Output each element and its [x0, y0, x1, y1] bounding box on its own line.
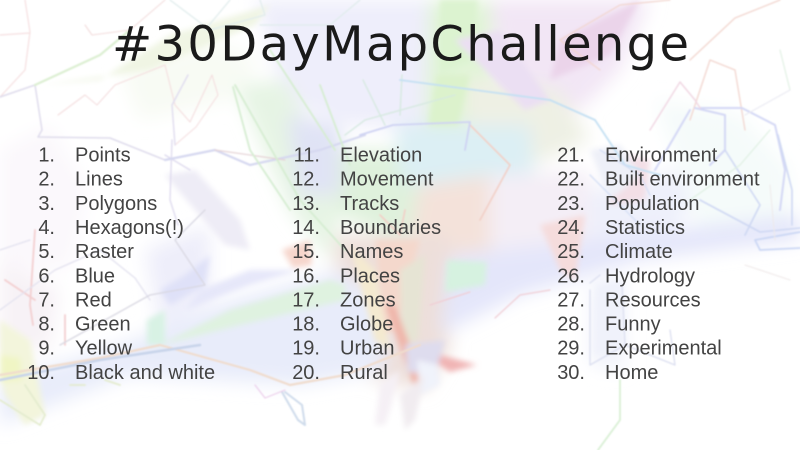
list column: days 1 to 10: Raster	[75, 241, 134, 263]
list column: days 21 to 30: Environment	[605, 144, 718, 166]
list column: days 1 to 10: 8.	[38, 314, 55, 336]
list column: days 21 to 30: 22.	[557, 169, 585, 191]
list column: days 1 to 10: Red	[75, 289, 112, 311]
list column: days 21 to 30: Built environment	[605, 169, 760, 191]
title: #30DayMapChallenge	[112, 16, 689, 72]
list column: days 11 to 20: Places	[340, 265, 400, 287]
list column: days 21 to 30: 21.	[557, 144, 585, 166]
list column: days 21 to 30: Population	[605, 193, 700, 215]
list column: days 1 to 10: Lines	[75, 169, 123, 191]
list column: days 1 to 10: Hexagons(!)	[75, 217, 184, 239]
list column: days 1 to 10: Green	[75, 314, 131, 336]
list column: days 21 to 30: Climate	[605, 241, 673, 263]
list column: days 11 to 20: Names	[340, 241, 403, 263]
list column: days 21 to 30: Resources	[605, 289, 701, 311]
list column: days 11 to 20: 15.	[292, 241, 320, 263]
list column: days 21 to 30: Experimental	[605, 338, 722, 360]
list column: days 21 to 30: 26.	[557, 265, 585, 287]
list column: days 21 to 30: Hydrology	[605, 265, 695, 287]
list column: days 1 to 10: 1.	[38, 144, 55, 166]
list column: days 1 to 10: Blue	[75, 265, 115, 287]
list column: days 11 to 20: 11.	[294, 144, 320, 166]
list column: days 21 to 30: 24.	[557, 217, 585, 239]
list column: days 1 to 10: 5.	[38, 241, 55, 263]
list column: days 11 to 20: 19.	[292, 338, 320, 360]
list column: days 1 to 10: 3.	[38, 193, 55, 215]
list column: days 11 to 20: Rural	[340, 362, 388, 384]
list column: days 1 to 10: 7.	[38, 289, 55, 311]
list column: days 11 to 20: 18.	[292, 314, 320, 336]
list column: days 11 to 20: Movement	[340, 169, 434, 191]
list column: days 11 to 20: Zones	[340, 289, 396, 311]
list column: days 1 to 10: 9.	[38, 338, 55, 360]
list column: days 21 to 30: Funny	[605, 314, 661, 336]
list column: days 1 to 10: Black and white	[75, 362, 215, 384]
list column: days 11 to 20: 17.	[292, 289, 320, 311]
list column: days 11 to 20: Urban	[340, 338, 394, 360]
list column: days 21 to 30: Statistics	[605, 217, 685, 239]
list column: days 1 to 10: Yellow	[75, 338, 133, 360]
list column: days 1 to 10	[27, 144, 215, 384]
list column: days 11 to 20: Tracks	[340, 193, 399, 215]
list column: days 1 to 10: 10.	[27, 362, 55, 384]
list column: days 1 to 10: 4.	[38, 217, 55, 239]
list column: days 1 to 10: Points	[75, 144, 131, 166]
list column: days 11 to 20: 13.	[292, 193, 320, 215]
list column: days 21 to 30: 23.	[557, 193, 585, 215]
list column: days 21 to 30: 30.	[557, 362, 585, 384]
list column: days 11 to 20: 16.	[292, 265, 320, 287]
list column: days 1 to 10: 2.	[38, 169, 55, 191]
list column: days 21 to 30: Home	[605, 362, 658, 384]
list column: days 11 to 20: Globe	[340, 314, 393, 336]
list column: days 11 to 20: 20.	[292, 362, 320, 384]
list column: days 11 to 20: Elevation	[340, 144, 422, 166]
list column: days 21 to 30: 25.	[557, 241, 585, 263]
list column: days 11 to 20: 12.	[292, 169, 320, 191]
list column: days 21 to 30	[557, 144, 760, 384]
list column: days 11 to 20: Boundaries	[340, 217, 441, 239]
list column: days 21 to 30: 29.	[557, 338, 585, 360]
list column: days 21 to 30: 28.	[557, 314, 585, 336]
list column: days 1 to 10: Polygons	[75, 193, 157, 215]
list column: days 11 to 20: 14.	[292, 217, 320, 239]
list column: days 11 to 20	[292, 144, 441, 384]
list column: days 21 to 30: 27.	[557, 289, 585, 311]
list column: days 1 to 10: 6.	[38, 265, 55, 287]
